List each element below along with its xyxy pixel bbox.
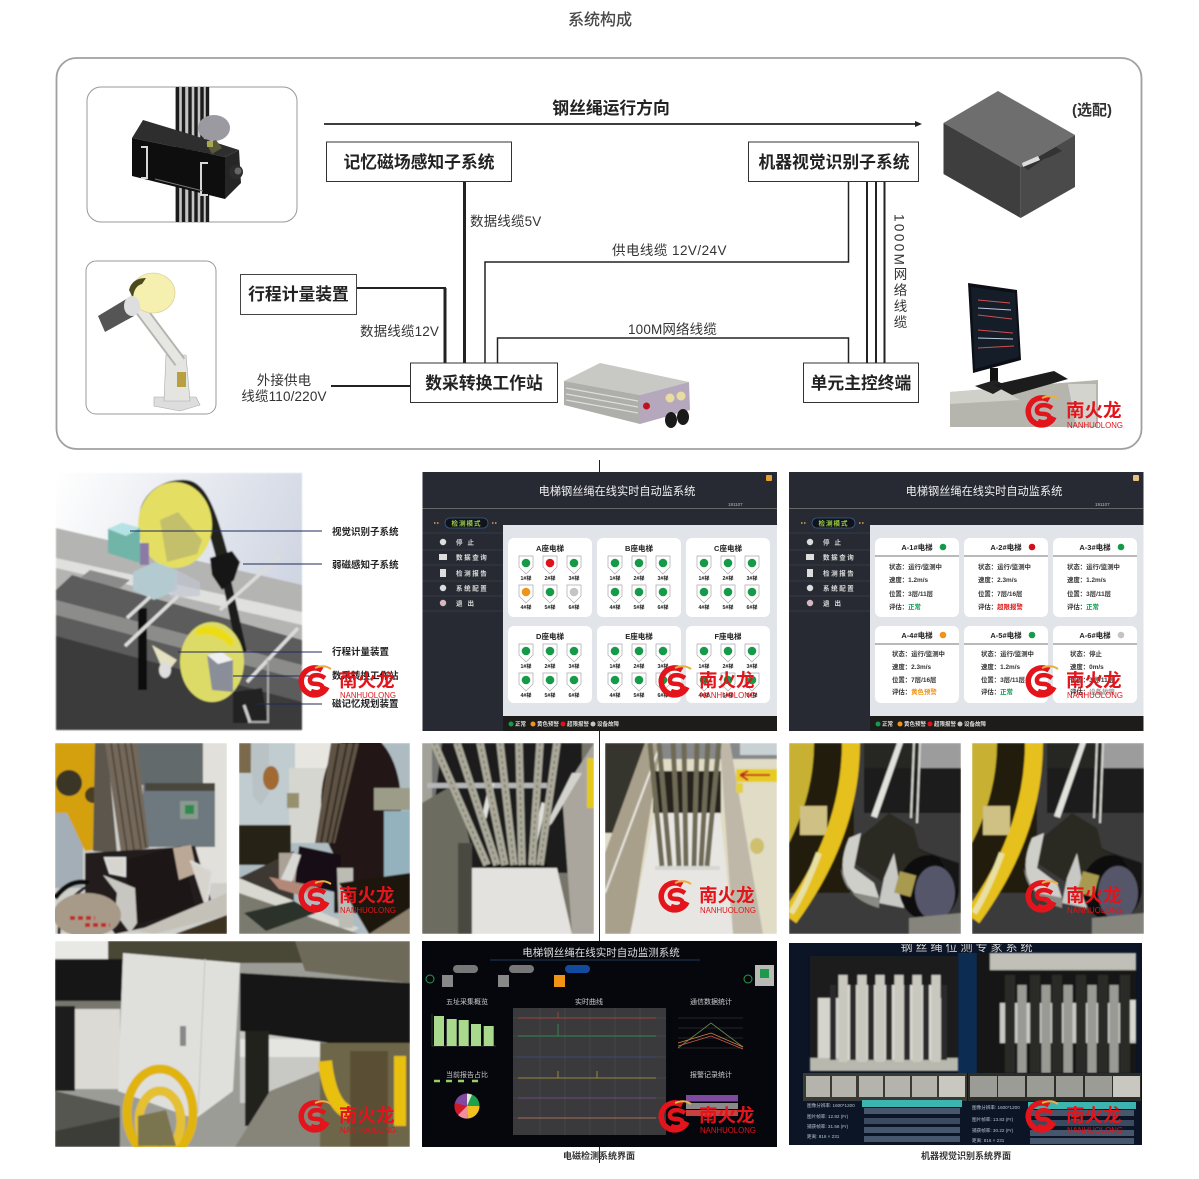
- label: optional: (选配): [1072, 102, 1112, 119]
- card: E building: 5#梯: [634, 691, 644, 699]
- box: memory magnetic subsystem: 记忆磁场感知子系统: [343, 152, 495, 172]
- bar chart: [432, 997, 496, 1046]
- card: F building: [686, 626, 770, 703]
- box: travel metering: 行程计量装置: [248, 285, 349, 304]
- logo: [661, 666, 756, 700]
- logo: NANHUOLONG: [700, 691, 756, 700]
- label: external power supply: 线缆110/220V: [241, 389, 327, 404]
- photo: ropes passing vertically through slot: [605, 743, 777, 934]
- card: F building: 6#梯: [747, 691, 757, 699]
- card: A-4: A-4#电梯: [901, 630, 933, 640]
- card: A-2: 位置：7层/16层: [978, 589, 1023, 598]
- card: A-5: 速度：1.2m/s: [981, 662, 1021, 671]
- panel: monitoring dashboard detail: 191107: [1095, 502, 1110, 507]
- card: A building: [508, 538, 592, 617]
- label: data cable 5V: 数据线缆5V: [470, 214, 541, 229]
- dashboard title: 电梯钢丝绳在线实时自动监系统: [539, 484, 695, 498]
- photo: travel meter roller, view 1: [789, 743, 961, 934]
- panel: system architecture: [56, 58, 1142, 449]
- card: B building: [597, 538, 681, 617]
- 3D scene: [56, 473, 302, 730]
- camera view right: [977, 953, 1136, 1073]
- card: E building: 6#梯: [658, 691, 668, 699]
- box: memory magnetic subsystem: [326, 142, 512, 182]
- card: A-5: 位置：3层/11层: [981, 675, 1026, 684]
- box: data acquisition station: 数采转换工作站: [425, 374, 543, 393]
- logo: 南火龙: [699, 885, 755, 906]
- legend: 超限报警: [934, 720, 957, 728]
- panel: travel metering device: [86, 261, 216, 414]
- legend: 设备故障: [597, 720, 620, 728]
- card: A building: 2#梯: [545, 574, 555, 582]
- screen title: 电梯钢丝绳在线实时自动监测系统: [522, 946, 680, 959]
- data readout right: 距离: 816 × 231: [972, 1137, 1005, 1144]
- card: B building: 5#梯: [634, 603, 644, 611]
- legend: [870, 716, 1144, 731]
- side menu: 退 出: [456, 598, 476, 608]
- card: F building: 2#梯: [723, 662, 733, 670]
- logo: [301, 1101, 396, 1135]
- box: machine vision subsystem: 机器视觉识别子系统: [758, 152, 910, 172]
- logo: NANHUOLONG: [700, 906, 756, 915]
- film strip right: [968, 1073, 1141, 1101]
- logo: [1028, 1101, 1123, 1135]
- legend: 正常: [882, 720, 894, 728]
- logo: 南火龙: [699, 670, 755, 691]
- card: A-5: 评估：正常: [981, 687, 1013, 696]
- connection lines: [331, 181, 884, 386]
- logo: NANHUOLONG: [1067, 906, 1123, 915]
- logo: 南火龙: [339, 885, 395, 906]
- arrow: rope travel direction: [324, 121, 922, 127]
- label: data cable 12V: 数据线缆12V: [360, 324, 439, 339]
- photo: installed control cabinet: [55, 941, 410, 1157]
- card: A-5: [964, 626, 1048, 703]
- callout labels: 数采转换工作站: [332, 670, 399, 682]
- card: C building: 1#梯: [699, 574, 709, 582]
- dashboard title: 电梯钢丝绳在线实时自动监系统: [906, 484, 1062, 498]
- side menu: 系统配置: [456, 584, 488, 592]
- panel: monitoring dashboard detail: [789, 472, 1144, 731]
- label: external power supply: [241, 372, 327, 404]
- label: power cable: 供电线缆 12V/24V: [612, 243, 727, 258]
- card: C building: C座电梯: [714, 543, 742, 553]
- side menu: 停 止: [823, 538, 843, 546]
- legend: 正常: [515, 720, 527, 728]
- data readout left: 距离: 816 × 231: [807, 1133, 840, 1140]
- line chart: [678, 997, 743, 1049]
- card: C building: 3#梯: [747, 574, 757, 582]
- card: A-6: 评估：设备故障: [1070, 687, 1115, 696]
- card: A building: 1#梯: [521, 574, 531, 582]
- card: A-6: [1053, 626, 1137, 703]
- alarm record bars: [686, 1070, 738, 1116]
- logo: NANHUOLONG: [340, 1126, 396, 1135]
- card: A-2: [964, 538, 1048, 617]
- data readout left: 捕获帧率: 31.56 (Fr): [807, 1123, 849, 1130]
- card: F building: 4#梯: [699, 691, 709, 699]
- side menu: 检测报告: [456, 568, 488, 578]
- logo: [1028, 666, 1123, 700]
- pie chart: [434, 1070, 488, 1119]
- logo: NANHUOLONG: [340, 691, 396, 700]
- card: A-2: 评估：超限报警: [978, 602, 1023, 611]
- card: C building: [686, 538, 770, 617]
- logo: [301, 666, 396, 700]
- center vertical connector line: [598, 460, 600, 1163]
- logo: NANHUOLONG: [340, 906, 396, 915]
- card: D building: 2#梯: [545, 662, 555, 670]
- logo: [661, 881, 756, 915]
- alarm record bars: 报警记录统计: [690, 1070, 732, 1079]
- data readout right: 图片帧率: 13.83 (Fr): [972, 1116, 1014, 1123]
- logo: 南火龙: [339, 670, 395, 691]
- logo: [301, 881, 396, 915]
- data readout right: 图像分辨率: 1600*1200: [972, 1104, 1020, 1111]
- icon: computer terminal: [950, 283, 1098, 427]
- photo: travel meter roller, view 2: [972, 743, 1144, 934]
- card: A-1: 状态：运行/监测中: [889, 562, 942, 571]
- card: D building: 4#梯: [521, 691, 531, 699]
- card: A-3: 位置：3层/11层: [1067, 589, 1112, 598]
- screen title: 钢丝绳位测专家系统: [900, 939, 1036, 954]
- box: machine vision subsystem: [748, 142, 918, 182]
- card: A-6: 状态：停止: [1070, 649, 1103, 658]
- callout lines: [130, 531, 322, 704]
- card: B building: 1#梯: [610, 574, 620, 582]
- logo: 南火龙: [339, 1105, 395, 1126]
- card: B building: 6#梯: [658, 603, 668, 611]
- callout labels: 弱磁感知子系统: [332, 559, 399, 571]
- card: B building: B座电梯: [625, 543, 653, 553]
- panel: monitoring dashboard overview: 191107: [728, 502, 743, 507]
- card: F building: 5#梯: [723, 691, 733, 699]
- card: A-3: [1053, 538, 1137, 617]
- label: 1000M network cable: 1000M网络线缆: [892, 214, 907, 331]
- card: A-3: 评估：正常: [1067, 602, 1099, 611]
- card: A-4: 速度：2.3m/s: [892, 662, 932, 671]
- card: A-2: 速度：2.3m/s: [978, 575, 1018, 584]
- card: B building: 4#梯: [610, 603, 620, 611]
- mode badge: [801, 518, 865, 528]
- card: D building: D座电梯: [536, 631, 564, 641]
- card: A-6: 速度：0m/s: [1070, 662, 1104, 671]
- label: 100M network cable: 100M网络线缆: [628, 322, 717, 337]
- side menu: 数据查询: [823, 552, 855, 562]
- logo: NANHUOLONG: [1067, 1126, 1123, 1135]
- card: A-3: 状态：运行/监测中: [1067, 562, 1120, 571]
- legend: 设备故障: [964, 720, 987, 728]
- legend: 超限报警: [567, 720, 590, 728]
- card: B building: 3#梯: [658, 574, 668, 582]
- logo: [1028, 396, 1123, 430]
- camera view left: [810, 956, 958, 1071]
- callout labels: [332, 526, 399, 710]
- card: A-4: 评估：黄色预警: [892, 687, 937, 696]
- photo: ropes fanned through sensor slot: [422, 743, 594, 934]
- card: E building: [597, 626, 681, 703]
- real-time curve chart: [513, 997, 666, 1135]
- data readout left: 图像分辨率: 1600*1200: [807, 1102, 855, 1109]
- card: F building: F座电梯: [714, 631, 742, 641]
- icon: steel ropes: [175, 87, 209, 222]
- caption: electromagnetic interface: 电磁检测系统界面: [563, 1150, 635, 1161]
- card: B building: 2#梯: [634, 574, 644, 582]
- side menu: 检测报告: [823, 568, 855, 578]
- card: A-2: A-2#电梯: [990, 542, 1022, 552]
- card: D building: 3#梯: [569, 662, 579, 670]
- data readout right: 捕获帧率: 30.22 (Fr): [972, 1127, 1014, 1134]
- card: A building: 6#梯: [569, 603, 579, 611]
- pie chart: 当前报告占比: [446, 1070, 488, 1079]
- card: A-1: 评估：正常: [889, 602, 921, 611]
- main area: [870, 525, 1144, 716]
- card: A-1: A-1#电梯: [901, 542, 933, 552]
- main area: [503, 525, 777, 716]
- icon: data acquisition hardware: [564, 363, 690, 428]
- logo: 南火龙: [1066, 670, 1122, 691]
- panel: machine vision interface: [789, 939, 1142, 1145]
- card: A-4: 状态：运行/监测中: [892, 649, 945, 658]
- legend: 黄色预警: [537, 720, 560, 728]
- data readout right: [972, 1102, 1136, 1144]
- box: data acquisition station: [410, 363, 558, 402]
- card: A-1: 位置：3层/11层: [889, 589, 934, 598]
- side menu: [789, 533, 870, 611]
- card: A-5: 状态：运行/监测中: [981, 649, 1034, 658]
- callout labels: 磁记忆规划装置: [332, 698, 399, 710]
- caption: machine vision interface: 机器视觉识别系统界面: [921, 1150, 1011, 1161]
- mode badge: [434, 518, 498, 528]
- callout labels: 行程计量装置: [332, 646, 390, 658]
- card: E building: 2#梯: [634, 662, 644, 670]
- icon: roller meter: [98, 273, 200, 411]
- side menu: 系统配置: [823, 584, 855, 592]
- box: travel metering: [240, 274, 356, 314]
- card: A building: 5#梯: [545, 603, 555, 611]
- box: unit main control terminal: 单元主控终端: [811, 374, 912, 393]
- mode badge: 检测模式: [452, 518, 482, 528]
- icon: sensor housing: [132, 115, 243, 199]
- panel: magnetic sensor device: [87, 87, 297, 222]
- film strip left: [803, 1073, 967, 1101]
- logo: NANHUOLONG: [1067, 691, 1123, 700]
- card: A building: A座电梯: [536, 543, 564, 553]
- photo: sensor on traction sheave, view 1: [55, 743, 227, 934]
- card: F building: 1#梯: [699, 662, 709, 670]
- status tabs: [426, 965, 774, 987]
- card: C building: 5#梯: [723, 603, 733, 611]
- card: A-1: 速度：1.2m/s: [889, 575, 929, 584]
- callout labels: 视觉识别子系统: [332, 526, 399, 538]
- label: rope direction: 钢丝绳运行方向: [552, 98, 670, 118]
- card: A-1: [875, 538, 959, 617]
- logo: 南火龙: [699, 1105, 755, 1126]
- card: D building: 5#梯: [545, 691, 555, 699]
- card: C building: 6#梯: [747, 603, 757, 611]
- label: external power supply: 外接供电: [257, 372, 311, 388]
- side menu: 停 止: [456, 538, 476, 546]
- line chart: 通信数据统计: [690, 997, 732, 1006]
- logo: 南火龙: [1066, 400, 1122, 421]
- card: A-3: 速度：1.2m/s: [1067, 575, 1107, 584]
- side menu: 退 出: [823, 598, 843, 608]
- card: E building: E座电梯: [625, 631, 653, 641]
- data readout left: [807, 1100, 962, 1142]
- logo: NANHUOLONG: [1067, 421, 1123, 430]
- real-time curve chart: 实时曲线: [575, 997, 603, 1006]
- card: A-4: 位置：7层/16层: [892, 675, 937, 684]
- card: C building: 2#梯: [723, 574, 733, 582]
- card: E building: 1#梯: [610, 662, 620, 670]
- side menu: [422, 533, 503, 611]
- bar chart: 五址采集概览: [446, 997, 488, 1006]
- panel: 3D installation diagram: [56, 473, 399, 730]
- card: A-6: 位置：3层/11层: [1070, 675, 1115, 684]
- logo: 南火龙: [1066, 885, 1122, 906]
- card: A-2: 状态：运行/监测中: [978, 562, 1031, 571]
- card: A-4: [875, 626, 959, 703]
- card: D building: 6#梯: [569, 691, 579, 699]
- logo: [1028, 881, 1123, 915]
- panel: electromagnetic detection interface: [422, 941, 777, 1147]
- card: E building: 3#梯: [658, 662, 668, 670]
- logo: 南火龙: [1066, 1105, 1122, 1126]
- side menu: 数据查询: [456, 552, 488, 562]
- card: C building: 4#梯: [699, 603, 709, 611]
- card: D building: 1#梯: [521, 662, 531, 670]
- card: A building: 4#梯: [521, 603, 531, 611]
- legend: 黄色预警: [904, 720, 927, 728]
- data readout left: 图片帧率: 12.82 (Fr): [807, 1113, 849, 1120]
- card: A-6: A-6#电梯: [1079, 630, 1111, 640]
- card: A-3: A-3#电梯: [1079, 542, 1111, 552]
- logo: [661, 1101, 756, 1135]
- card: E building: 4#梯: [610, 691, 620, 699]
- logo: NANHUOLONG: [700, 1126, 756, 1135]
- title: 系统构成: [568, 11, 632, 29]
- legend: [503, 716, 777, 731]
- icon: optional black enclosure: [944, 91, 1075, 218]
- photo: sensor on traction sheave, view 2: [239, 733, 410, 934]
- card: A building: 3#梯: [569, 574, 579, 582]
- mode badge: 检测模式: [818, 518, 848, 528]
- card: F building: 3#梯: [747, 662, 757, 670]
- panel: monitoring dashboard overview: [422, 472, 777, 731]
- card: A-5: A-5#电梯: [990, 630, 1022, 640]
- box: unit main control terminal: [804, 363, 918, 402]
- card: D building: [508, 626, 592, 703]
